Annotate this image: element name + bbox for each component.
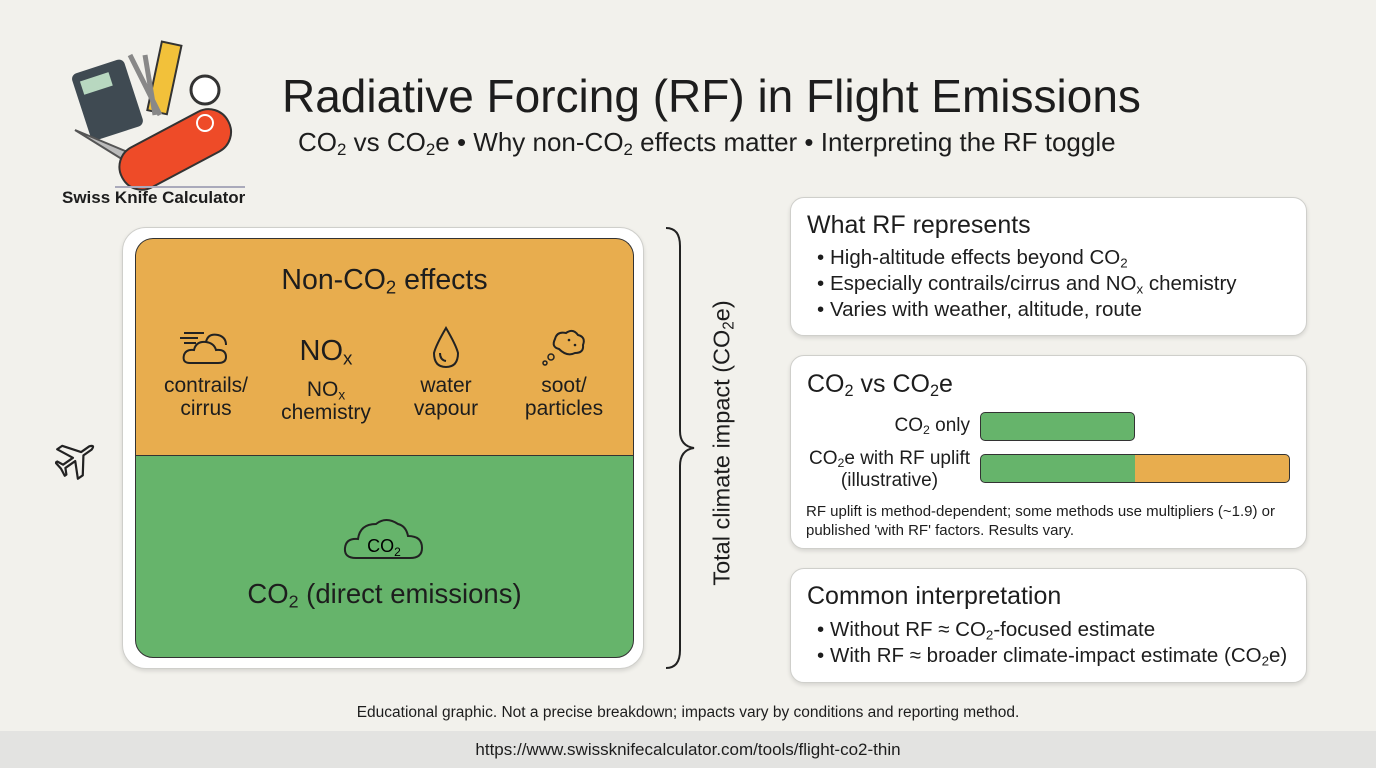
non-CO2 section	[135, 238, 634, 455]
icon: CO2 cloud: CO	[367, 536, 394, 556]
bar: CO2e	[980, 454, 1290, 483]
item: contrails: cirrus	[180, 397, 232, 420]
icon: CO2 cloud	[344, 519, 423, 559]
logo	[72, 40, 245, 191]
brace	[666, 227, 694, 669]
icon: CO2 cloud: 2	[394, 545, 401, 559]
subtitle: CO2 vs CO2e • Why non-CO2 effects matter • Interpreting the RF toggle	[298, 127, 1116, 159]
item: contrails	[164, 332, 248, 420]
panel: common interpretation: With RF ≈ broader climate-impact estimate (CO2e)	[830, 644, 1287, 668]
panel: common interpretation: Common interpretation	[807, 582, 1061, 610]
bar label: CO2e	[809, 448, 970, 491]
vertical label: Total climate impact (CO2e)	[708, 300, 737, 586]
footnote: Educational graphic. Not a precise breakdown; impacts vary by conditions and reporting method.	[357, 704, 1019, 721]
panel: common interpretation: Without RF ≈ CO2-focused estimate	[830, 618, 1155, 642]
CO2 section	[135, 455, 634, 658]
bar label: CO2 only: CO2 only	[894, 415, 970, 437]
item: NOx: NOx	[300, 335, 352, 369]
panel: CO2 vs CO2e	[790, 355, 1307, 549]
panel: common interpretation	[790, 568, 1307, 683]
panel: what RF represents: High-altitude effects beyond CO2	[830, 246, 1128, 270]
item: NOx: chemistry	[281, 401, 371, 424]
panel: what RF represents	[790, 197, 1307, 336]
item: water vapour: vapour	[414, 397, 478, 420]
item: contrails: contrails/	[164, 374, 248, 397]
bar: CO2 only	[980, 412, 1135, 441]
note: RF uplift is method-dependent; some methods use multipliers (~1.9) or published 'with RF' factors. Results vary.	[806, 503, 1275, 539]
icon: plane	[55, 444, 94, 480]
bar label: CO2e: (illustrative)	[841, 470, 938, 491]
title: Radiative Forcing (RF) in Flight Emissions	[282, 70, 1141, 122]
item: water vapour: water	[420, 374, 472, 397]
item: soot: soot/	[541, 374, 587, 397]
item: NOx	[281, 335, 371, 424]
panel: CO2 vs CO2e: CO2 vs CO2e	[807, 370, 953, 400]
panel: what RF represents: What RF represents	[807, 211, 1031, 239]
panel: stacked diagram	[122, 227, 644, 669]
CO2 label: CO2 (direct emissions)	[247, 578, 522, 611]
panel: what RF represents: Varies with weather, altitude, route	[830, 298, 1142, 321]
logo text: Swiss Knife Calculator	[62, 188, 245, 207]
item: soot	[525, 330, 603, 420]
heading: Non-CO2 effects	[281, 264, 488, 298]
footer bar: https://www.swissknifecalculator.com/tools/flight-co2-thin	[475, 740, 901, 759]
item: water vapour	[414, 326, 478, 420]
item: soot: particles	[525, 397, 603, 420]
bar label: CO2e: CO2e with RF uplift	[809, 448, 970, 470]
item: NOx: NOx	[307, 378, 345, 402]
panel: what RF represents: Especially contrails/cirrus and NOx chemistry	[830, 272, 1237, 296]
footer bar	[0, 731, 1376, 768]
